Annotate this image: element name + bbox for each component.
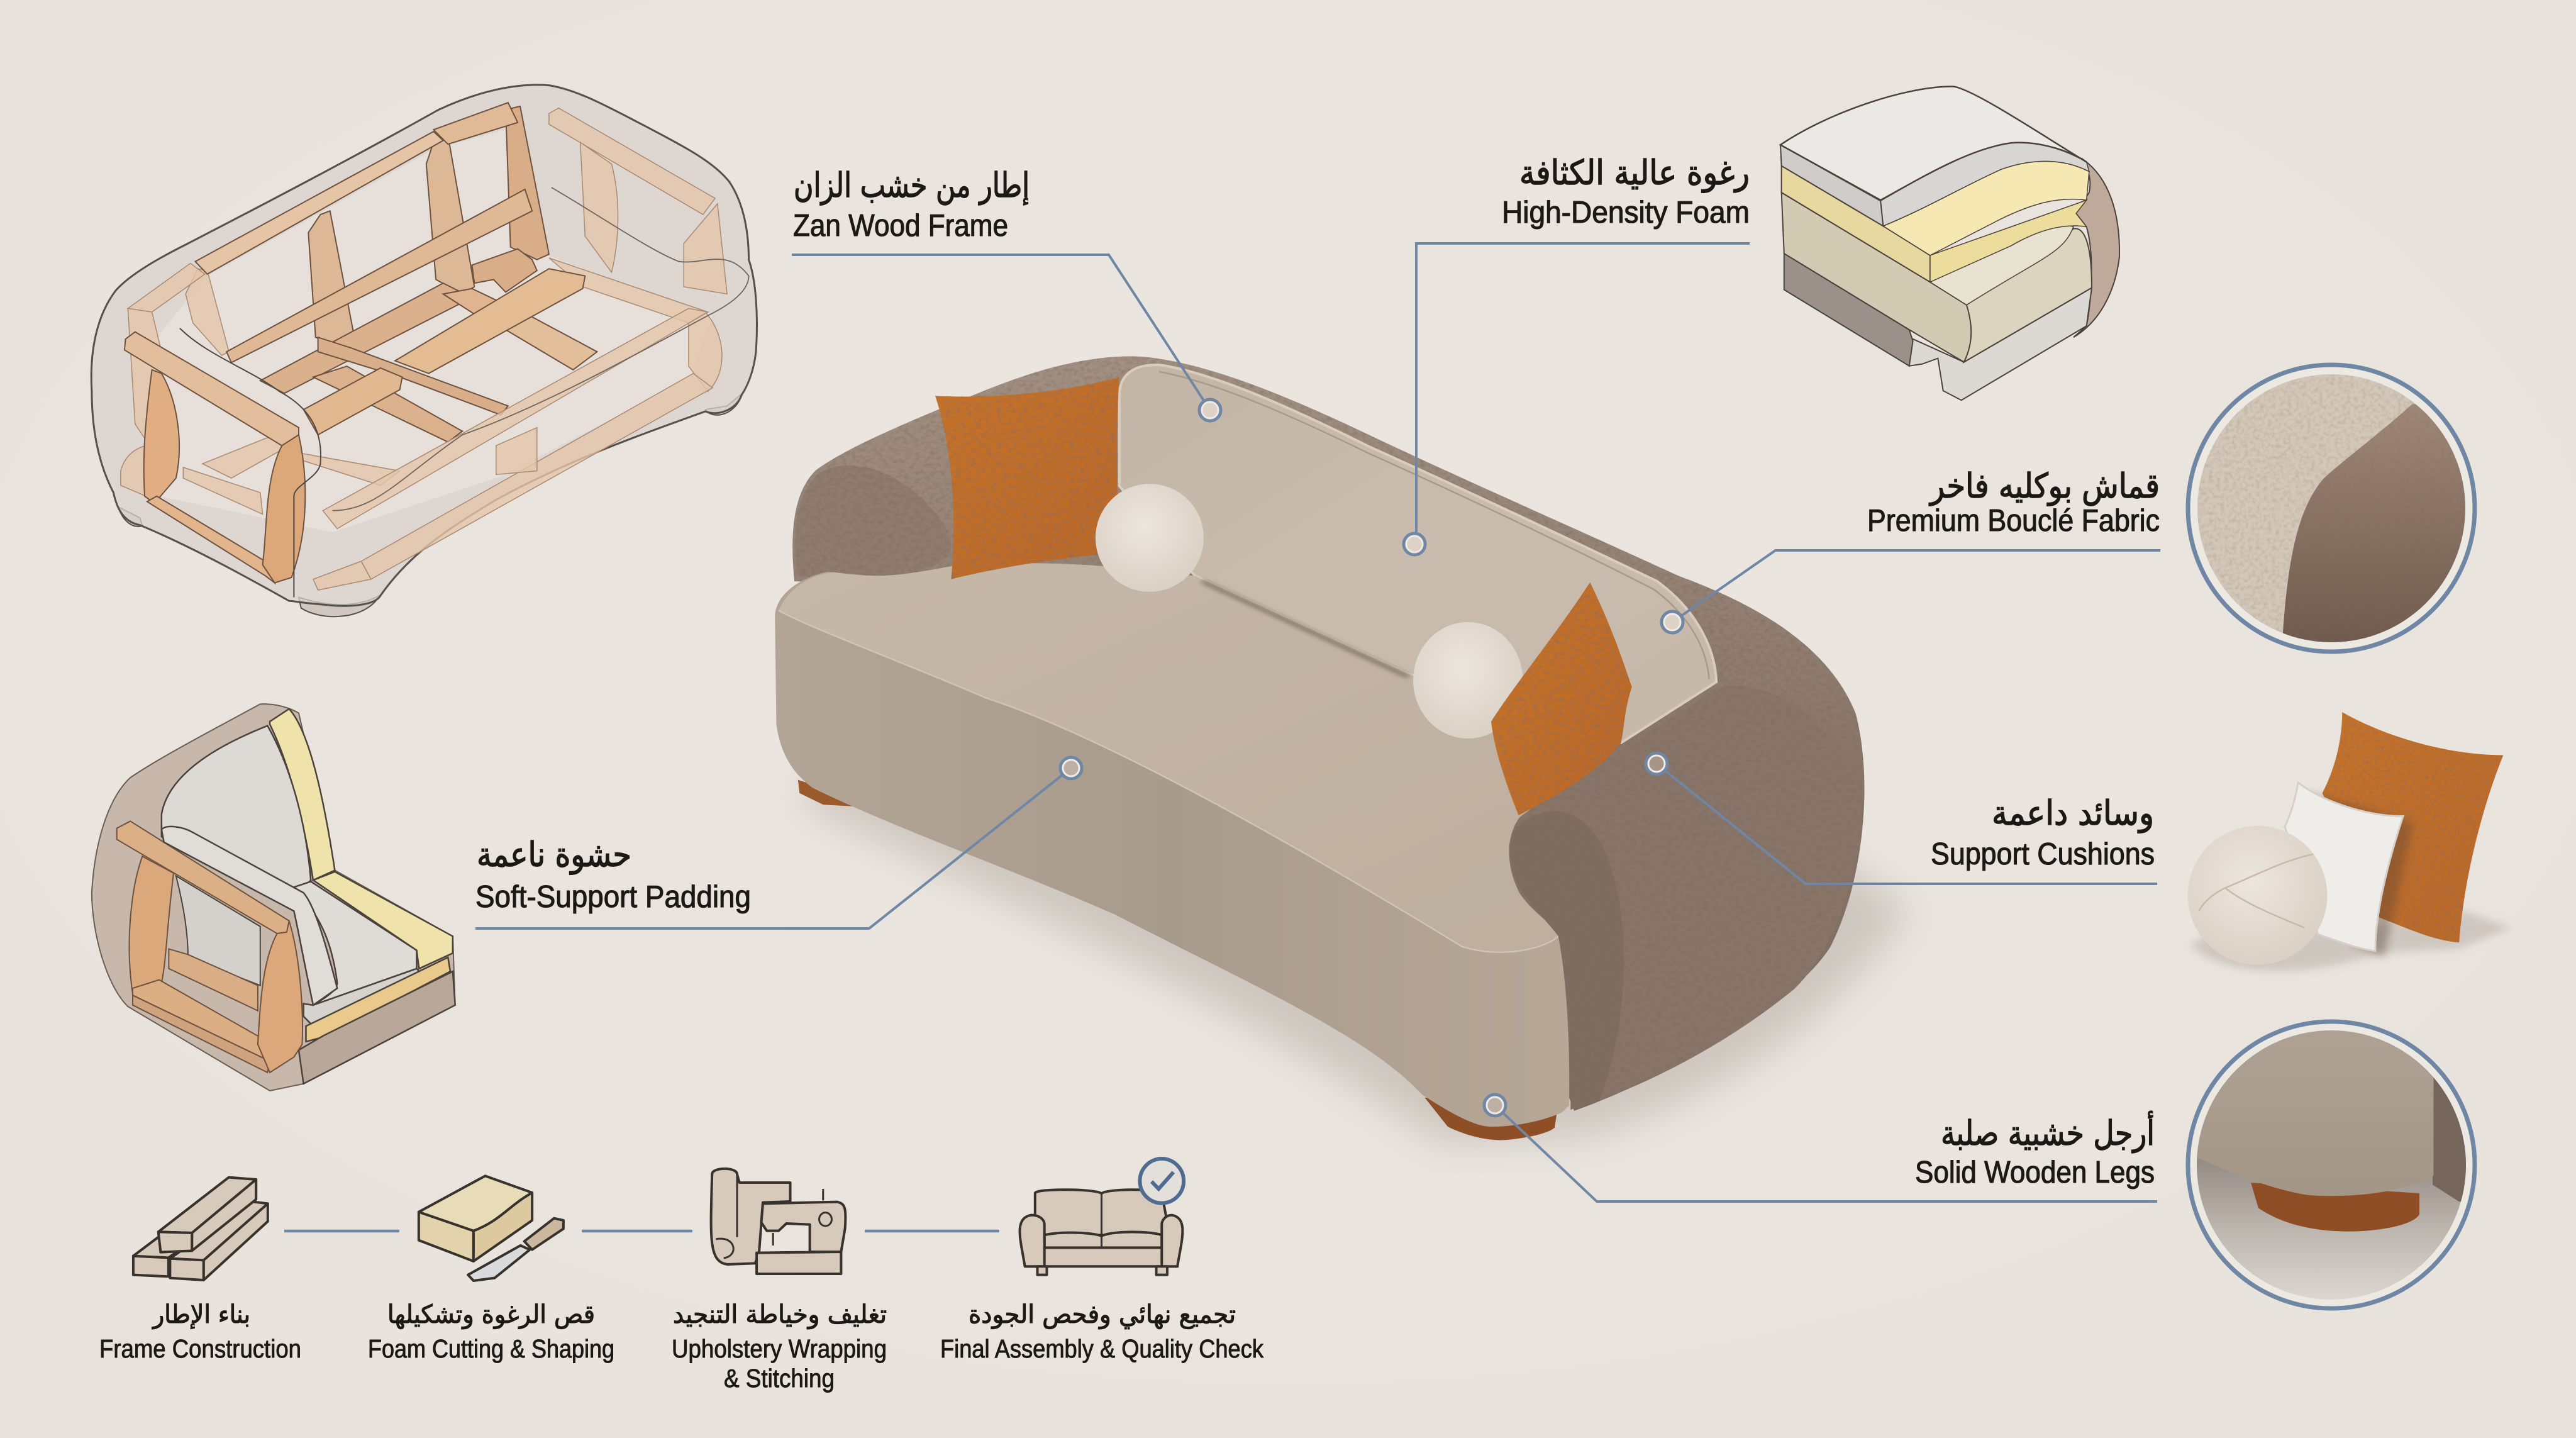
inner open space (145, 125, 713, 532)
sofa wooden leg right (1424, 1098, 1558, 1140)
step 4 label: تجميع نهائي وفحص الجودة (969, 1300, 1236, 1329)
translucent front rails (121, 308, 713, 590)
circle: boucle fabric detail (2188, 365, 2480, 652)
seat front face (775, 572, 1569, 1127)
right arm face (1509, 811, 1624, 1110)
cushion white (2285, 783, 2403, 951)
seat foam yellow (313, 872, 453, 969)
label: support cushions (1931, 793, 2155, 871)
step 2 label: Foam Cutting & Shaping (368, 1334, 614, 1363)
step 1 label: Frame Construction (99, 1334, 301, 1363)
seat top (779, 563, 1621, 952)
label: support cushions: Support Cushions (1931, 837, 2155, 871)
floor shadow under sofa (798, 767, 1910, 1142)
label: zan wood frame: إطار من خشب الزان (794, 165, 1030, 205)
arm pad (162, 827, 337, 1005)
frame outer shell (91, 85, 757, 606)
frame contour lines (180, 328, 321, 598)
label: solid wooden legs: أرجل خشبية صلبة (1941, 1111, 2155, 1153)
foam white top (1780, 87, 2087, 200)
light fabric (2197, 374, 2465, 642)
frame feet (118, 393, 743, 616)
label: high-density foam (1502, 153, 1750, 230)
padding brown shell (92, 704, 455, 1091)
ball cushion left (1096, 484, 1204, 592)
wood under seat (306, 957, 450, 1042)
ball seams (2199, 854, 2314, 928)
label: high-density foam: رغوة عالية الكثافة (1519, 153, 1750, 192)
back padding gray (162, 726, 311, 893)
label: solid wooden legs: Solid Wooden Legs (1915, 1156, 2155, 1190)
label: soft-support padding: حشوة ناعمة (477, 835, 631, 874)
step 4 label (940, 1300, 1263, 1363)
process connectors (284, 1230, 999, 1232)
icon: wood beams (133, 1178, 268, 1280)
foam brown cover edge (2074, 158, 2119, 337)
icon: foam block and knife (419, 1176, 564, 1281)
back foam yellow (270, 709, 335, 880)
label: premium boucle fabric: قماش بوكليه فاخر (1928, 466, 2160, 506)
rear arm translucent (549, 108, 727, 391)
illustration: support cushions (2188, 712, 2512, 971)
label: zan wood frame (793, 165, 1030, 243)
label: premium boucle fabric: Premium Bouclé Fabric (1867, 504, 2160, 538)
base (299, 971, 455, 1084)
circle: wooden leg detail (2177, 1020, 2485, 1315)
step 3 label: & Stitching (724, 1364, 835, 1393)
back cushion (1119, 365, 1716, 743)
back cushion piping (1159, 372, 1709, 679)
label: solid wooden legs (1915, 1111, 2155, 1190)
foam dark base (1784, 254, 1913, 366)
step 2 label (368, 1300, 614, 1363)
cushion ball (2188, 826, 2327, 965)
label: premium boucle fabric (1867, 466, 2160, 538)
illustration: transparent wood frame (91, 85, 757, 616)
cushion white shadow (2309, 793, 2413, 957)
floor (2197, 1145, 2466, 1300)
back posts and rails (128, 103, 549, 460)
ball cushion right (1413, 622, 1523, 739)
main sofa illustration (775, 356, 1865, 1140)
step 3 label: تغليف وخياطة التنجيد (673, 1300, 887, 1329)
cushion orange (2323, 712, 2503, 942)
seat edge gray (304, 969, 419, 1026)
sofa dark boucle shell and arms (792, 356, 1865, 1111)
fabric (2197, 1030, 2434, 1196)
label: support cushions: وسائد داعمة (1992, 793, 2154, 833)
label: zan wood frame: Zan Wood Frame (793, 209, 1008, 243)
step labels (99, 1300, 1263, 1393)
step 3 label (672, 1300, 887, 1393)
pillow right orange (1491, 582, 1632, 815)
left arm highlight (796, 465, 951, 577)
leader lines (475, 243, 2160, 1201)
seat padding gray (294, 881, 416, 1005)
seat frame beams (183, 249, 597, 515)
step 1 label: بناء الإطار (152, 1300, 250, 1329)
seat and back crease (1202, 581, 1408, 677)
icon: finished sofa with check (1020, 1159, 1184, 1275)
inner back padding (176, 876, 260, 986)
dark arm (2433, 1076, 2466, 1201)
foam beige layer (1782, 192, 1972, 362)
leg (2251, 1183, 2419, 1232)
label: soft-support padding: Soft-Support Padding (475, 880, 751, 914)
label: soft-support padding (475, 835, 751, 914)
seat edge seam (779, 610, 1558, 952)
icon: fabric roll and sewing machine (711, 1169, 845, 1274)
check badge (1140, 1159, 1184, 1203)
front arm wood (125, 332, 305, 583)
right arm top highlight (1524, 686, 1860, 1100)
step 4 label: Final Assembly & Quality Check (940, 1334, 1263, 1363)
dark fabric (2282, 404, 2480, 646)
step 3 label: Upholstery Wrapping (672, 1334, 887, 1363)
foam gray cover sides (1880, 143, 2089, 226)
step 2 label: قص الرغوة وتشكيلها (387, 1300, 595, 1329)
step 1 label (99, 1300, 301, 1363)
sofa wooden leg left (798, 780, 856, 806)
label: high-density foam: High-Density Foam (1502, 196, 1750, 230)
cushions shadow (2190, 911, 2512, 971)
foam yellow layer (1782, 166, 1930, 282)
pillow left orange (935, 377, 1121, 579)
foam gray bottom (1909, 287, 2092, 400)
illustration: foam layers (1780, 87, 2119, 400)
side wood parts (117, 821, 303, 1073)
callout dots (1060, 399, 1683, 1116)
illustration: soft padding cutaway (92, 704, 455, 1091)
